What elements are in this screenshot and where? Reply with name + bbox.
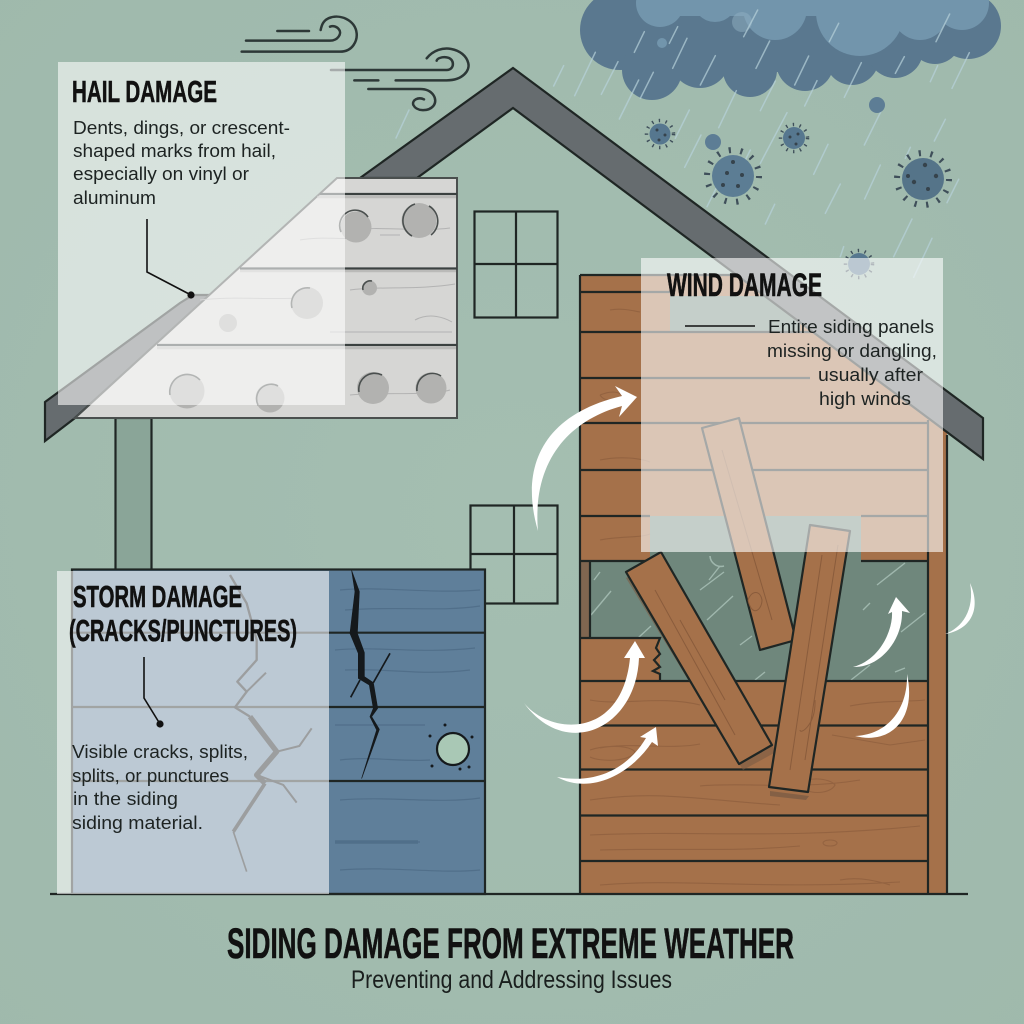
heading: storm damage	[69, 579, 297, 648]
heading: wind damage: WIND DAMAGE	[667, 267, 822, 303]
wind swirl: upper	[242, 17, 357, 52]
text: wind damage description: Entire siding panels	[768, 317, 934, 337]
virus-like hail balls	[646, 120, 949, 278]
heading: hail damage: HAIL DAMAGE	[72, 74, 217, 109]
text: storm damage description	[72, 742, 248, 833]
text: hail damage description: Dents, dings, or crescent-	[73, 118, 290, 138]
text: wind damage description: usually after	[818, 365, 923, 385]
text: hail damage description	[73, 118, 290, 208]
heading: storm damage: STORM DAMAGE	[73, 579, 242, 614]
text: wind damage description: high winds	[819, 389, 911, 409]
text: hail damage description: especially on vinyl or	[73, 164, 249, 184]
text: hail damage description: aluminum	[73, 188, 156, 208]
text: wind damage description: missing or dangling,	[767, 341, 937, 361]
text: wind damage description	[767, 317, 937, 409]
cracks	[230, 571, 390, 872]
hail stones	[705, 97, 885, 150]
subtitle: Preventing and Addressing Issues	[351, 966, 672, 994]
text: storm damage description: Visible cracks, splits,	[72, 742, 248, 762]
heading: storm damage: (CRACKS/PUNCTURES)	[69, 613, 297, 648]
rain	[396, 10, 969, 277]
text: storm damage description: in the siding	[73, 789, 178, 809]
loose plank: centre	[702, 418, 796, 650]
window: upper	[474, 211, 558, 318]
arrows: wind motion	[524, 386, 975, 784]
panel: storm damage	[57, 571, 329, 894]
puncture hole	[428, 724, 474, 770]
ground line	[50, 893, 968, 895]
roof	[45, 68, 983, 459]
support post	[116, 418, 152, 570]
leader line: wind	[685, 325, 755, 327]
hail dented siding	[75, 178, 457, 418]
window: lower	[470, 505, 558, 604]
panel: wind damage	[641, 258, 943, 552]
text: storm damage description: siding material.	[72, 813, 203, 833]
storm damaged blue siding	[72, 570, 485, 894]
wood siding wall	[580, 275, 947, 894]
leader line: storm	[144, 657, 164, 728]
text: storm damage description: splits, or punctures	[72, 766, 229, 786]
wind swirl: lower	[331, 49, 469, 110]
storm cloud	[580, 0, 1001, 100]
panel: hail damage	[58, 62, 345, 405]
leader line: hail	[147, 219, 195, 299]
text: hail damage description: shaped marks from hail,	[73, 141, 276, 161]
loose plank: right	[769, 525, 850, 800]
loose plank: left	[626, 552, 776, 770]
